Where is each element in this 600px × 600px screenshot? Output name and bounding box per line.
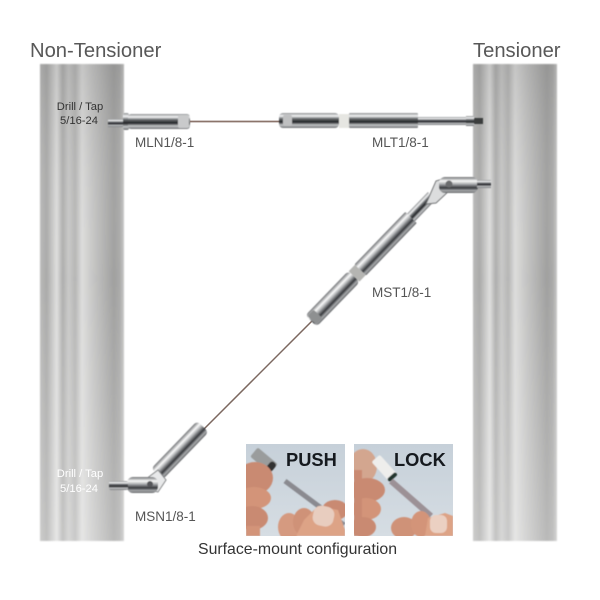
label: MST1/8-1: MST1/8-1 xyxy=(372,285,431,300)
caption: Surface-mount configuration xyxy=(198,541,397,558)
label: drill and tap top: Drill / Tap xyxy=(57,101,103,113)
photo detail: hands and parts xyxy=(349,449,453,539)
fitting: top non-tensioner MLN xyxy=(108,113,190,130)
cable: top xyxy=(190,120,280,122)
label: drill and tap top: 5/16-24 xyxy=(60,115,98,127)
PUSH text: PUSH xyxy=(286,449,337,470)
heading: Non-Tensioner: Non-Tensioner xyxy=(30,40,162,62)
label: MLT1/8-1: MLT1/8-1 xyxy=(372,135,429,150)
LOCK text: LOCK xyxy=(394,449,447,470)
photo: PUSH xyxy=(246,444,345,536)
label: drill and tap bottom: Drill / Tap xyxy=(57,468,103,480)
fitting: top tensioner MLT xyxy=(279,113,483,128)
label: MSN1/8-1: MSN1/8-1 xyxy=(135,509,196,524)
panel: left post xyxy=(40,64,124,541)
label: drill and tap bottom: 5/16-24 xyxy=(60,483,98,495)
photo: LOCK xyxy=(349,444,453,539)
cable: diagonal xyxy=(204,319,314,429)
panel: right post xyxy=(473,64,557,541)
label: MLN1/8-1: MLN1/8-1 xyxy=(135,135,194,150)
photo detail: hands and parts xyxy=(246,448,345,536)
heading: Tensioner: Tensioner xyxy=(473,40,561,62)
fitting: diagonal non-tensioner MSN xyxy=(109,421,209,493)
fitting: diagonal tensioner MST xyxy=(305,177,491,327)
